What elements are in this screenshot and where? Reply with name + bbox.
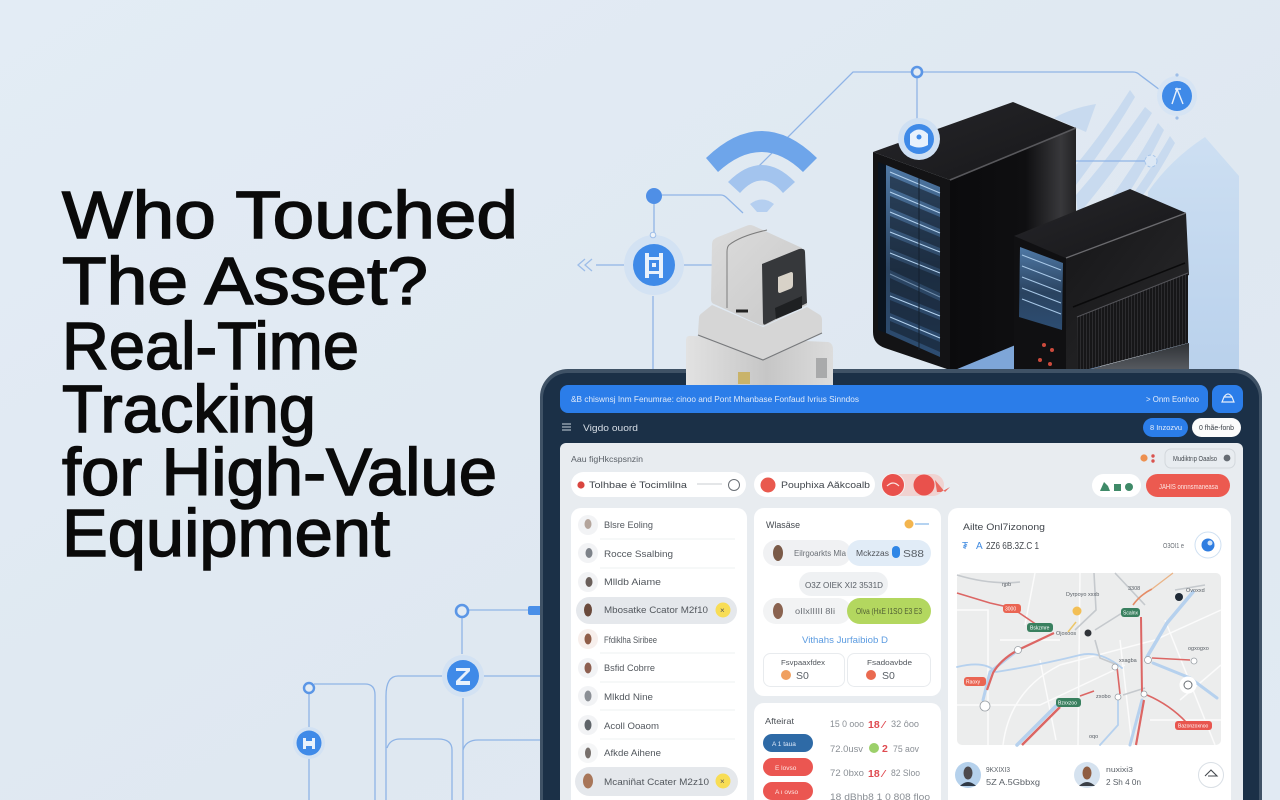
yellow badges: × [720,606,725,615]
title: Equipment [62,496,390,571]
dashboard panel [560,443,1243,800]
user names: Ffdiklha Siribee [604,635,657,646]
panel: matches: Mckzzas [856,549,889,558]
person two: nuxixi3 [1106,767,1133,774]
map labels: ogxogxo [1188,646,1209,652]
dashboard header: Aau figHkcspsnzin [571,455,643,464]
panel: alerts: 2 [882,743,888,755]
map labels: Ojoxoos [1056,631,1076,637]
node: bottom connector dot 1 [304,683,314,693]
panel: live tracking: Ailte Onl7izonong [963,522,1045,533]
panel: matches: OIva (HxE I1SO E3 E3 [856,607,922,616]
node: bottom connector dot 2 [456,605,468,617]
panel: live tracking: ₮ [962,541,968,552]
status pill: red [1146,474,1230,497]
map gray roads [957,573,1205,695]
panel: alerts: 82 Sloo [891,768,920,778]
panel: matches [754,508,941,696]
panel: asset user list [571,508,747,800]
network lines: bottom left [309,610,540,800]
filter pill: position [754,472,875,497]
map tags: Scalnx [1123,610,1139,616]
map labels: 3308 [1128,586,1140,592]
stat box 1 [764,654,844,686]
map tags: 3000 [1005,606,1016,612]
row highlight: selected user 2 [575,767,738,796]
row highlight: selected user 1 [576,597,737,624]
person one: 5Z A.5Gbbxg [986,777,1040,787]
user names [604,520,709,788]
map labels [1002,582,1209,740]
dashboard header [571,449,1235,468]
panel: matches: S88 [903,548,924,560]
map routes [957,589,1190,745]
dashboard toolbar: 8 Inzozvu [1150,425,1182,432]
top banner: &B chiswnsj Inm Fenumrae: cinoo and Pont Mhanbase Fonfaud Ivrius Sinndos [571,394,859,404]
panel: matches: Fsvpaaxfdex [781,658,825,667]
user names: Mlldb Aiame [604,577,661,588]
title: The Asset? [62,244,428,319]
person two: 2 Sh 4 0n [1106,777,1141,787]
map labels: xxagba [1119,658,1138,664]
map pins [1072,606,1082,616]
panel: matches: Fsadoavbde [867,658,912,667]
row: person two [763,598,851,624]
filter pill: position: Pouphixa Aăkcoalb [781,480,870,491]
user names: Afkde Aihene [604,748,661,759]
glow under servers [940,335,1100,372]
dashboard toolbar: 0 fhãe-fonb [1199,425,1234,432]
alert pills [763,734,813,752]
map tags [964,604,1212,730]
person two [1074,762,1141,788]
panel: matches: Wlasäse [766,520,800,530]
panel: matches: O3Z OIEK XI2 3531D [805,580,883,590]
dashboard toolbar: Vigdo ouord [583,423,638,433]
tablet screen [543,373,1259,800]
yellow badges: × [720,777,725,786]
server: large rack [873,102,1076,372]
panel: alerts: 18 ⁄ [868,768,887,780]
server: small rack [1014,189,1189,372]
dashboard toolbar [562,418,1241,437]
map tags: Raoxy [966,680,981,686]
panel: matches: oIIxIIIII 8Ii [795,607,835,616]
yellow badges [716,602,730,788]
code chip [799,572,888,596]
tablet frame [540,369,1262,800]
icon: small line node [1145,155,1157,167]
device: scanner [686,225,833,385]
map tags: Bskzmre [1030,626,1050,632]
filter pill: touch: Tolhbae ė Tocimlilna [589,480,688,491]
panel: alerts: 72 0bxo [830,768,864,778]
panel: alerts [754,703,941,800]
user names: Mbosatke Ccator M2f10 [604,605,708,616]
user names: Rocce Ssalbing [604,549,673,560]
icon: wifi signal [706,131,817,212]
title: Tracking [62,372,316,447]
title: Who Touched [62,178,518,253]
panel: alerts: E lovso [775,765,797,772]
dashboard header: Mudiktrıp Oaalso [1173,456,1217,463]
stat box 2 [848,654,930,686]
map labels: zxobo [1096,694,1111,700]
link: Vithahs Jurfaibiob D [802,635,889,645]
panel: live tracking [948,508,1231,800]
background arcs and blob [1054,90,1239,372]
icon: location button [1195,532,1221,558]
map labels: Dyrpoyo xxxb [1066,592,1099,598]
row dividers [600,539,735,739]
panel: live tracking: 2Z6 6B.3Z.C 1 [986,541,1039,552]
avatars [578,515,598,788]
title [62,178,518,571]
user names: Blsre Eoling [604,520,653,531]
title: Real-Time [62,309,359,384]
icon: server badge [898,118,940,160]
map tags: Bazonzoxnoo [1178,724,1209,730]
map labels: oqo [1089,734,1098,740]
title: for High-Value [62,435,497,510]
panel: live tracking: O3OI1 e [1163,543,1184,550]
panel: matches: S0 [796,670,809,682]
map tags: Bzxxzoo [1058,700,1077,706]
network lines: top [596,72,1160,370]
banner button [1212,385,1243,413]
panel: alerts: 72.0usv [830,744,864,754]
icon: share button [1198,762,1224,788]
status pill: green icons [1092,474,1141,497]
user names: Mcaniñat Ccater M2z10 [604,777,709,788]
icon: left node badge [624,232,684,295]
panel: alerts: Afteirat [765,716,795,726]
arrow: chevrons [578,259,592,271]
map labels: ŋpb [1002,582,1011,588]
top banner: > Onm Eonhoo [1146,394,1199,404]
node: top connector dot [912,67,922,77]
panel: alerts: A 1 taua [772,741,796,748]
panel: alerts: 32 ôoo [891,719,919,729]
row: person one [763,540,851,566]
panel: matches: Eilrgoarkts Mla [794,549,847,558]
panel: alerts: A ı ovso [775,789,799,796]
top banner [560,385,1208,413]
icon: bottom node badge large [442,655,484,697]
alert values: 15 0 ooo [830,719,864,729]
panel: live tracking: A [976,541,983,552]
person one [955,762,1040,788]
panel: alerts: 18 ⁄ [868,719,887,731]
user names: Acoll Ooaom [604,721,659,732]
person one: 9KXIXI3 [986,767,1010,774]
user names: Mlkdd Nine [604,692,653,703]
panel: alerts: 75 aov [893,744,919,754]
status pill: red: JAHIS onnnsmaneasa [1159,482,1219,491]
filter pill: touch [571,472,746,497]
red action buttons [882,474,950,496]
icon: bottom node badge small [293,727,325,759]
map rivers [957,592,1217,745]
map [957,573,1221,745]
node: left solid dot [646,188,662,204]
user names: Bsfid Cobrre [604,663,655,674]
connector tab [528,606,542,615]
map labels: Ovoxxd [1186,588,1205,594]
icon: top right badge [1157,73,1197,120]
panel: matches: S0 [882,670,895,682]
map streets [957,573,1221,745]
